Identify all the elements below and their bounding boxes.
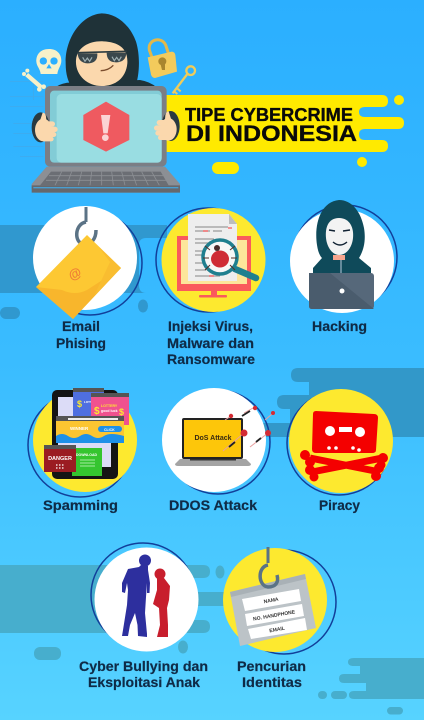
circle	[33, 206, 137, 310]
label: Pencurian	[237, 658, 306, 674]
panel: cyber bullying	[79, 543, 208, 690]
icon: child silhouette	[153, 568, 170, 637]
circle	[290, 209, 394, 313]
icon: identity form	[230, 574, 316, 646]
circle	[289, 389, 393, 493]
left hand	[32, 112, 58, 142]
label: DDOS Attack	[169, 497, 257, 513]
label: Identitas	[242, 674, 302, 690]
pop-up: lottery blue: $	[77, 399, 82, 409]
icon: monitor	[177, 236, 251, 298]
ring	[293, 205, 397, 309]
label: Phising	[56, 335, 106, 351]
icon: document	[188, 214, 237, 281]
label: Hacking	[312, 318, 367, 334]
hood and shoulders	[55, 13, 157, 100]
background shapes: middle right	[250, 368, 424, 437]
ring	[232, 550, 336, 654]
icon: adult silhouette	[122, 554, 151, 637]
pop-up: winner	[56, 416, 124, 443]
icon: fish hook	[260, 547, 278, 587]
icon: fish hook	[77, 207, 96, 244]
icon: tablet	[52, 390, 118, 479]
icon: cassette	[312, 411, 378, 453]
exclamation mark	[101, 115, 110, 141]
icon: envelope: @	[66, 264, 84, 283]
background shapes: lower left	[0, 565, 225, 660]
label: Cyber Bullying dan	[79, 658, 208, 674]
panel: pencurian identitas	[223, 547, 336, 690]
panel: hacking	[290, 200, 397, 334]
faint circuit lines	[10, 82, 43, 157]
label: Spamming	[43, 497, 118, 513]
pop-up: lottery pink: good luck	[101, 409, 118, 413]
sunglasses	[77, 51, 127, 63]
label: Eksploitasi Anak	[88, 674, 200, 690]
icon: crossbones	[300, 450, 388, 482]
panel: ddos attack	[162, 388, 275, 513]
label: Injeksi Virus,	[168, 318, 253, 334]
pop-up: lottery pink: LOTTERY	[101, 404, 118, 408]
warning hexagon	[83, 102, 129, 152]
mouth	[101, 65, 113, 71]
panel: email phising	[33, 206, 142, 351]
ring	[38, 211, 142, 315]
ring	[28, 393, 132, 497]
icon: hooded figure	[313, 200, 371, 280]
icon: identity form: NO. HANDPHONE	[253, 609, 296, 623]
background shapes: lower right	[318, 658, 424, 714]
icon: identity form: EMAIL	[269, 626, 285, 634]
background shapes: top left	[0, 225, 167, 319]
panel: piracy	[287, 389, 393, 513]
ring	[91, 543, 195, 647]
pop-up: lottery pink: $	[94, 406, 100, 417]
panel: injeksi virus	[156, 208, 266, 367]
ring	[156, 208, 260, 312]
header banner	[160, 95, 404, 174]
icon: identity form: NAMA	[263, 597, 279, 605]
circle	[162, 388, 266, 492]
pop-up: winner: CLICK	[104, 428, 115, 432]
label: Malware dan	[167, 335, 254, 351]
label: Piracy	[319, 497, 360, 513]
icon: bone	[22, 69, 46, 92]
circle	[33, 388, 137, 492]
label: Ransomware	[167, 351, 255, 367]
yellow banner shape	[160, 95, 404, 152]
laptop screen	[50, 91, 162, 163]
pop-up: lottery pink	[91, 393, 129, 425]
pop-up: download: DOWNLOAD	[76, 453, 97, 457]
circle	[223, 548, 327, 652]
ring	[287, 391, 391, 495]
illustration: hacker with laptop	[10, 13, 195, 193]
ring	[166, 390, 270, 494]
icon: envelope	[36, 235, 121, 319]
laptop base	[32, 167, 180, 193]
title: DI INDONESIA	[186, 121, 357, 146]
icon: padlock	[148, 40, 177, 78]
laptop lid	[45, 86, 167, 167]
icon: magnifier with bug	[203, 240, 256, 278]
right hand	[154, 111, 180, 141]
pop-up: winner: WINNER	[70, 426, 89, 431]
attack dots and dashes	[223, 406, 275, 451]
icon: key	[173, 66, 195, 94]
circle	[162, 208, 266, 312]
panel: spamming	[28, 388, 137, 513]
pop-up: lottery pink: $	[119, 407, 124, 417]
pop-up: lottery blue	[73, 388, 104, 418]
icon: laptop	[309, 273, 374, 309]
decorative yellow dots	[212, 95, 404, 174]
icon: laptop	[175, 418, 251, 466]
screen text: DoS Attack	[194, 435, 232, 442]
label: Email	[62, 318, 100, 334]
icon: skull	[36, 49, 61, 74]
pop-up: lottery blue: LOTTERY	[84, 400, 98, 404]
title: TIPE CYBERCRIME	[185, 105, 353, 125]
face	[76, 41, 127, 86]
circle	[94, 548, 198, 652]
pop-up: danger: DANGER	[48, 456, 72, 462]
